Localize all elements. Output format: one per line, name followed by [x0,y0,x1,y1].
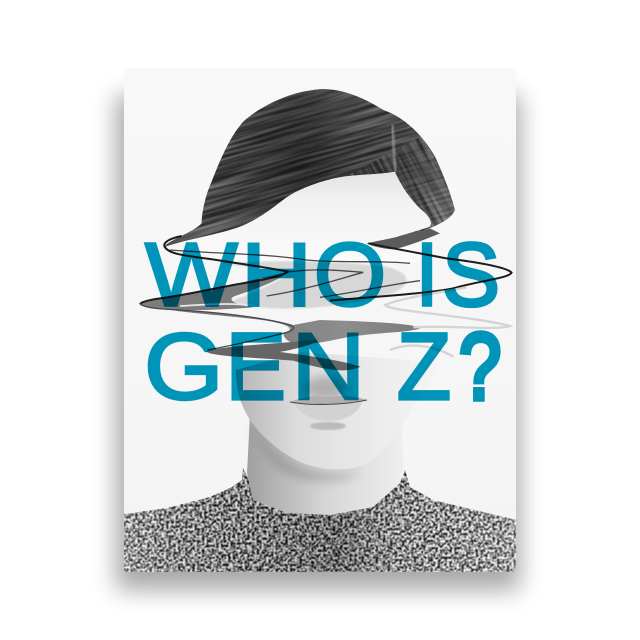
distorted glitch ribbons [140,228,512,370]
neck [247,415,403,515]
grey band lower [206,340,361,370]
lip shadow [310,422,346,430]
grey band left [140,272,288,310]
hair fold right [367,228,440,249]
black strand right [330,243,512,301]
lower face [236,352,437,469]
poster background [124,68,516,572]
black strand left upper [140,236,288,304]
title: WHO IS GEN Z? [144,224,501,420]
hair part [392,125,396,172]
WHO IS: O [314,225,386,325]
nose shadow [304,376,348,400]
pale ribbon right [385,287,510,357]
WHO IS: I [415,225,439,325]
WHO IS: S [442,224,500,325]
dark strand left lower [140,304,294,350]
inner strands [170,250,420,297]
jaw shadow on neck [250,422,363,481]
GEN Z?: ? [459,314,501,420]
WHO IS: W [145,224,238,325]
upper lip [290,396,367,404]
skin smear upper [220,261,407,309]
GEN Z?: Z [397,314,451,420]
GEN Z?: N [291,313,365,419]
GEN Z?: E [226,313,286,420]
hair [163,89,455,248]
pale gap stripe [180,304,260,307]
poster drop shadow [116,95,520,590]
forehead [170,160,436,262]
poster [124,84,516,572]
GEN Z?: G [144,313,224,419]
portrait photograph [124,89,516,572]
WHO IS: H [241,224,312,325]
WHO IS [145,224,500,325]
lower lip [294,402,362,421]
lip line [290,400,367,404]
grey band middle [170,310,420,344]
GEN Z? [144,313,501,420]
sweater [124,466,516,572]
lips [290,396,367,430]
